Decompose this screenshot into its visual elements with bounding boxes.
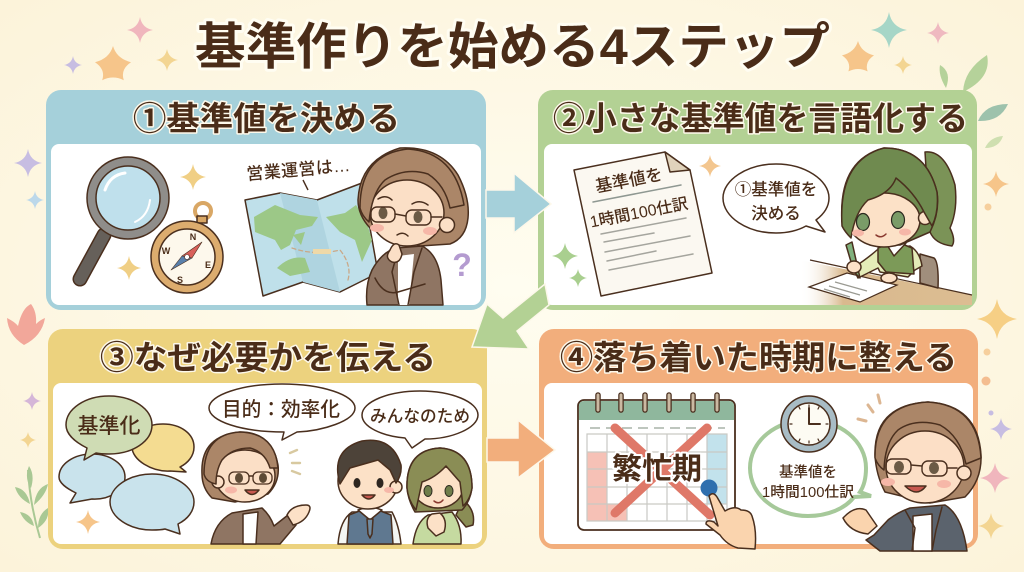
icon: sparkle: [180, 164, 206, 190]
calendar: [578, 395, 735, 530]
icon: magnifying glass: [80, 157, 169, 279]
speech bubble with text: 基準値を: [779, 464, 837, 481]
icon: sparkles green: [552, 243, 587, 287]
heading: step 4: ④落ち着いた時期に整える: [560, 339, 957, 376]
icon: compass: W: [162, 246, 171, 256]
character: smiling woman: [843, 402, 981, 551]
speech bubble: ①基準値を: [735, 180, 817, 199]
arrow: step 3 to step 4: [487, 420, 555, 478]
speech bubble: [723, 164, 829, 233]
speech bubble: for everyone: みんなのため: [370, 407, 470, 426]
icon: sparkle: [117, 256, 141, 280]
icon: world map: [245, 183, 378, 296]
icon: compass: E: [205, 260, 211, 270]
speech bubble: 決める: [751, 204, 801, 223]
heading: step 3: ③なぜ必要かを伝える: [100, 339, 436, 376]
icon: question mark: ?: [452, 247, 472, 283]
arrow: step 2 to step 3: [472, 284, 549, 349]
character: girl listening: [407, 448, 474, 544]
panel: step 4: [539, 329, 981, 551]
document: 1時間100仕訳: [588, 195, 690, 231]
heading: step 2: ②小さな基準値を言語化する: [553, 100, 968, 137]
speech bubble with text: 1時間100仕訳: [762, 484, 855, 501]
arrow: step 1 to step 2: [486, 173, 551, 233]
label: map caption: 営業運営は…: [246, 156, 351, 184]
emphasis marks: [858, 395, 880, 421]
speech bubbles: 基準化: [78, 415, 140, 438]
desk with paper: [800, 260, 972, 305]
panel: step 1: [46, 90, 486, 310]
icon: compass: N: [190, 232, 196, 242]
icon: pointing hand: [706, 494, 756, 549]
icon: sparkle: [76, 510, 100, 534]
emphasis marks: [290, 450, 300, 474]
speech bubble with text: [750, 420, 871, 516]
heading: step 1: ①基準値を決める: [133, 100, 400, 137]
icon: compass: [151, 203, 223, 293]
character: girl writing: [842, 148, 956, 288]
speech bubble: purpose: [209, 384, 355, 440]
character: boy: [338, 440, 402, 544]
icon: clock: [781, 396, 837, 452]
speech bubble: for everyone: [362, 391, 478, 448]
speech bubble: purpose: 目的：効率化: [222, 398, 340, 421]
character: woman explaining: [202, 432, 310, 544]
character: worried woman with glasses: [358, 148, 468, 305]
panel: step 3: [48, 329, 487, 549]
speech bubbles: [59, 396, 194, 534]
panel: step 2: [538, 90, 977, 310]
calendar: 繁忙期: [612, 453, 702, 486]
title: 基準作りを始める4ステップ: [195, 19, 830, 75]
icon: compass: S: [177, 275, 183, 285]
document: 基準値を: [594, 165, 664, 196]
icon: sparkle: [699, 155, 721, 177]
document: [574, 152, 712, 296]
